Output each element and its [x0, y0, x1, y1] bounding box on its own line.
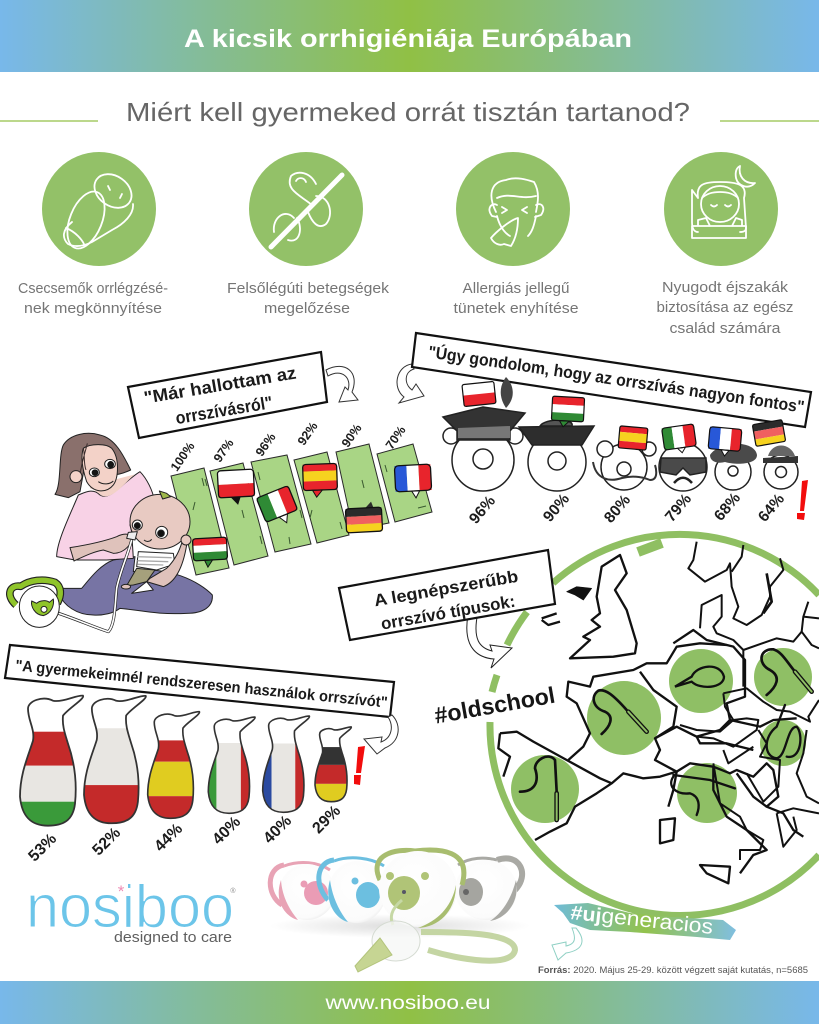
icon: red exclamation [354, 746, 365, 785]
title: A kicsik orrhigiéniája Európában [184, 25, 632, 53]
hashtag: oldschool: #oldschool [432, 682, 557, 729]
bar labels: 90% [339, 421, 365, 450]
text: benefit 4: Nyugodt éjszakák [662, 279, 789, 296]
text: benefit 1: Csecsemők orrlégzésé- [18, 280, 168, 297]
map outlines west [498, 555, 803, 883]
bottle labels [25, 802, 344, 865]
head labels: 64% [755, 491, 788, 525]
head labels: 90% [540, 491, 573, 525]
bottle labels: 29% [309, 802, 344, 837]
text: benefit 3: tünetek enyhítése [454, 300, 578, 317]
panel: benefit 3 allergy [454, 152, 578, 317]
heading box: regular use: "A gyermekeimnél rendszeresen használok orrszívót" [15, 657, 388, 712]
hose [45, 540, 132, 632]
device [10, 580, 60, 605]
heading box: heard of aspirator: orrszívásról" [174, 392, 274, 428]
device: pink [270, 863, 335, 920]
head labels: 80% [601, 492, 634, 526]
bottle labels: 53% [25, 830, 60, 865]
bar labels [168, 419, 409, 474]
heading box: heard of aspirator [128, 352, 327, 438]
icon: sneezing face [489, 178, 543, 246]
panel: benefit 1 baby [18, 152, 168, 317]
bar labels: 100% [168, 440, 198, 474]
footer bar [0, 981, 819, 1024]
subtitle with side rules: Miért kell gyermeked orrát tisztán tartanod? [126, 97, 690, 127]
bottle: Italy [208, 716, 256, 814]
flag: Spain [303, 463, 338, 498]
arrow: to map [467, 612, 512, 668]
icon: red exclamation [797, 480, 808, 520]
bottle: France [262, 715, 310, 814]
head: characters [443, 377, 798, 491]
text: benefit 4: biztosítása az egész [656, 299, 794, 316]
illustration: mother with baby and aspirator [10, 433, 212, 632]
green markers [511, 648, 812, 823]
icon: crossed virus [271, 173, 342, 247]
flag: Poland [217, 469, 255, 506]
source note: Forrás: 2020. Május 25-29. között végzett saját kutatás, n=5685 [538, 965, 808, 976]
arrow: to heads [397, 364, 424, 403]
device: green [377, 850, 464, 928]
flag: Germany head [752, 420, 786, 446]
bottle labels: 40% [260, 812, 295, 847]
device: blue [319, 858, 386, 923]
arrow: to bottles [364, 715, 398, 754]
mother hair [55, 433, 131, 498]
flag: Germany [345, 501, 383, 533]
bar labels: 92% [295, 419, 321, 448]
baby body [137, 552, 175, 570]
bottle: Poland [83, 695, 147, 824]
mother face [82, 445, 117, 491]
bottle labels: 40% [209, 813, 244, 848]
panel: benefit 4 night [656, 152, 794, 337]
baby head [130, 494, 190, 549]
head labels: 79% [662, 491, 695, 525]
aspirator icons [520, 649, 812, 820]
bar labels: 97% [211, 436, 237, 465]
mother neck [90, 474, 135, 496]
flag: Italy [256, 486, 301, 530]
mother pants [60, 557, 212, 615]
heads chart: national characters [443, 377, 808, 527]
device: grey [455, 858, 522, 921]
flag: Hungary [192, 537, 228, 568]
logo: nosiboo: designed to care [114, 929, 232, 946]
flag: France [394, 464, 432, 499]
logo: nosiboo: nosiboo [26, 873, 234, 940]
hashtag: ujgeneracios: #uj [569, 902, 603, 927]
bar labels: 70% [383, 423, 409, 452]
bottle: Germany [314, 726, 352, 802]
hashtag: ujgeneracios: generacios [600, 904, 714, 939]
flag: Spain head [618, 426, 648, 450]
tube and nozzle [355, 900, 515, 972]
text: benefit 4: család számára [670, 320, 781, 337]
bottle labels: 44% [151, 820, 186, 855]
logo: nosiboo: ® [230, 887, 236, 895]
heading box: most popular types: A legnépszerűbb [373, 567, 520, 610]
bottle: Spain [146, 710, 200, 820]
mother arm [70, 534, 133, 561]
flag: France head [708, 427, 742, 457]
text: benefit 2: Felsőlégúti betegségek [227, 280, 390, 297]
flag: Hungary hat [551, 396, 585, 428]
map outlines east [680, 542, 819, 860]
heading box: most popular types: orrszívó típusok: [379, 592, 517, 634]
bottle chart: regular aspirator use [15, 691, 365, 865]
mother shirt [57, 472, 154, 560]
head labels [466, 490, 788, 527]
header bar [0, 0, 819, 72]
ring [490, 534, 819, 916]
arrow: to source [552, 928, 582, 960]
logo: nosiboo: * [118, 882, 125, 901]
flag: Italy head [662, 424, 697, 455]
bottle labels: 52% [89, 824, 124, 859]
heading box: heard of aspirator: "Már hallottam az [142, 362, 298, 408]
arrow: to bars [326, 366, 358, 402]
icon: sleeping child [692, 166, 755, 238]
hashtag: ujgeneracios [554, 901, 736, 940]
product: nosiboo aspirators [270, 850, 530, 972]
footer bar: www.nosiboo.eu [324, 993, 490, 1014]
bar chart: heard of aspirator [168, 419, 432, 575]
panel: benefit 2 virus [227, 152, 390, 317]
text: benefit 3: Allergiás jellegű [462, 280, 570, 297]
icon: swaddled baby [60, 167, 138, 254]
text: benefit 2: megelőzése [264, 300, 350, 317]
bar labels: 96% [253, 430, 279, 459]
head labels: 96% [466, 493, 499, 527]
bottle: Hungary [19, 694, 84, 827]
head labels: 68% [711, 490, 744, 524]
heading box: most popular types [339, 550, 555, 640]
flag: Poland hat [462, 381, 496, 407]
map: Europe in ring [490, 534, 819, 916]
text: benefit 1: nek megkönnyítése [24, 300, 162, 317]
